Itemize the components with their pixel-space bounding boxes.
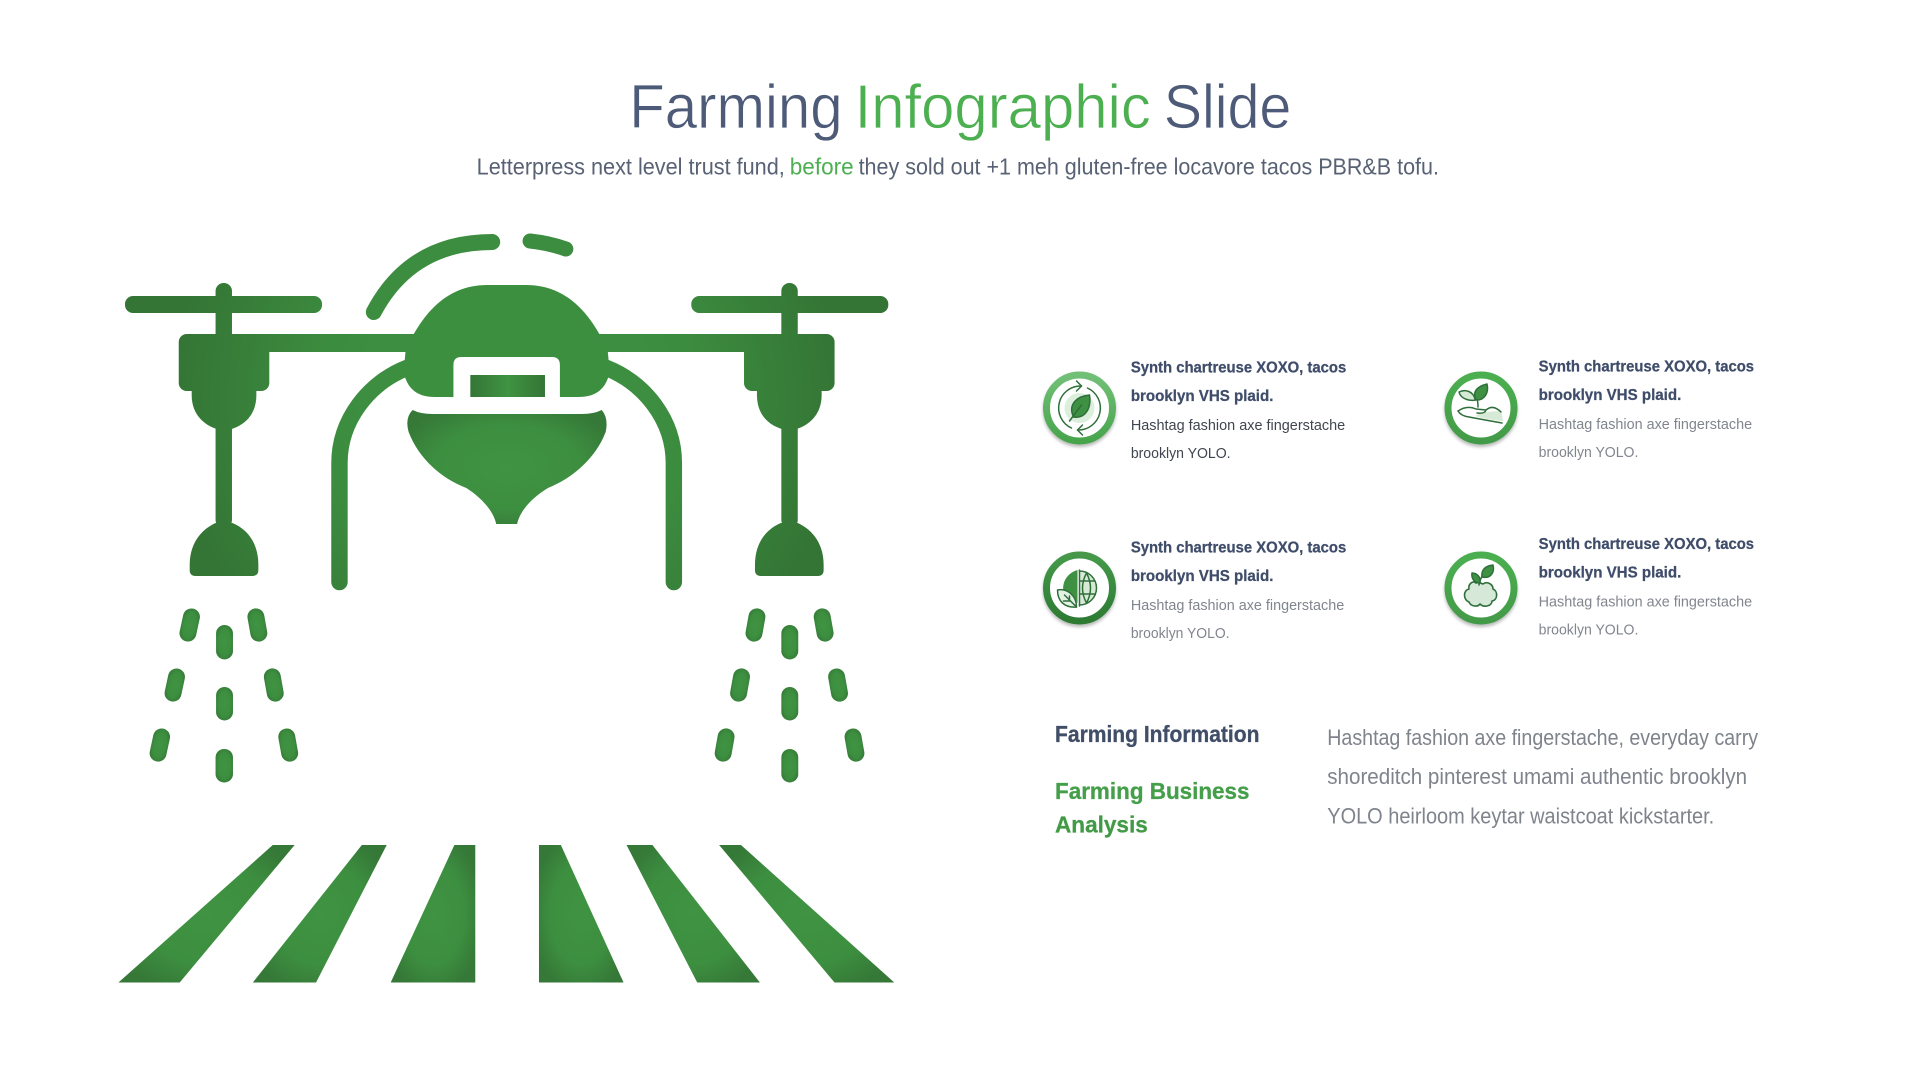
heading: farming business analysis bbox=[1055, 778, 1249, 838]
text block: item 3: Hashtag fashion axe fingerstache bbox=[1131, 597, 1344, 614]
drone illustration bbox=[125, 241, 888, 582]
heading: farming business analysis: Farming Business bbox=[1055, 778, 1249, 804]
paragraph: Hashtag fashion axe fingerstache, everyday carry bbox=[1327, 725, 1758, 750]
heading: farming business analysis: Analysis bbox=[1055, 812, 1148, 838]
subtitle: Letterpress next level trust fund, bbox=[477, 154, 785, 180]
tank hopper bbox=[407, 410, 607, 524]
text block: item 2 bbox=[1539, 358, 1754, 461]
text block: item 4: Hashtag fashion axe fingerstache bbox=[1539, 593, 1752, 610]
crop field rows bbox=[118, 845, 894, 982]
subtitle: they sold out +1 meh gluten-free locavore tacos PBR&B tofu. bbox=[859, 154, 1439, 180]
landing legs bbox=[339, 368, 674, 582]
text block: item 2: brooklyn YOLO. bbox=[1539, 444, 1638, 461]
text block: item 4: brooklyn YOLO. bbox=[1539, 622, 1638, 639]
camera window bbox=[470, 375, 545, 397]
text block: item 2: Hashtag fashion axe fingerstache bbox=[1539, 416, 1752, 433]
text block: item 1: Hashtag fashion axe fingerstache bbox=[1131, 417, 1345, 434]
text block: item 2: brooklyn VHS plaid. bbox=[1539, 387, 1681, 404]
text block: item 4: brooklyn VHS plaid. bbox=[1539, 564, 1681, 581]
title: Farming bbox=[629, 73, 843, 142]
drone arm bar bbox=[200, 334, 814, 352]
left rotor and sprayer bbox=[125, 283, 322, 576]
spray droplets: right nozzle bbox=[713, 607, 866, 782]
text block: item 1: brooklyn YOLO. bbox=[1131, 445, 1231, 462]
paragraph: YOLO heirloom keytar waistcoat kickstarter. bbox=[1327, 804, 1714, 829]
text block: item 4 bbox=[1539, 536, 1754, 639]
icon: fruit sprout bbox=[1448, 555, 1514, 621]
icon: hand with sprout bbox=[1448, 375, 1514, 441]
text block: item 3: Synth chartreuse XOXO, tacos bbox=[1131, 539, 1346, 556]
text layer: title and subtitle bbox=[477, 73, 1439, 180]
title: Slide bbox=[1164, 73, 1291, 142]
icon: globe and leaf bbox=[1046, 555, 1112, 621]
title bbox=[629, 73, 1291, 142]
text block: item 3: brooklyn YOLO. bbox=[1131, 625, 1230, 642]
paragraph bbox=[1327, 725, 1758, 829]
text block: item 2: Synth chartreuse XOXO, tacos bbox=[1539, 358, 1754, 375]
text block: item 4: Synth chartreuse XOXO, tacos bbox=[1539, 536, 1754, 553]
signal arcs bbox=[374, 241, 566, 312]
text block: item 3 bbox=[1131, 539, 1346, 642]
right rotor and sprayer bbox=[691, 283, 888, 576]
spray droplets: left nozzle bbox=[148, 607, 299, 782]
text block: item 1: brooklyn VHS plaid. bbox=[1131, 388, 1273, 405]
title: Infographic bbox=[855, 73, 1151, 142]
icon: leaf recycle bbox=[1046, 375, 1112, 441]
paragraph: shoreditch pinterest umami authentic brooklyn bbox=[1327, 764, 1747, 789]
text layer: items and details bbox=[1055, 358, 1758, 838]
text block: item 1: Synth chartreuse XOXO, tacos bbox=[1131, 359, 1346, 376]
subtitle bbox=[477, 154, 1439, 180]
text block: item 1 bbox=[1131, 359, 1346, 462]
subtitle: before bbox=[790, 154, 854, 180]
text block: item 3: brooklyn VHS plaid. bbox=[1131, 568, 1273, 585]
drone body bbox=[404, 285, 610, 397]
heading: farming information: Farming Information bbox=[1055, 721, 1259, 747]
